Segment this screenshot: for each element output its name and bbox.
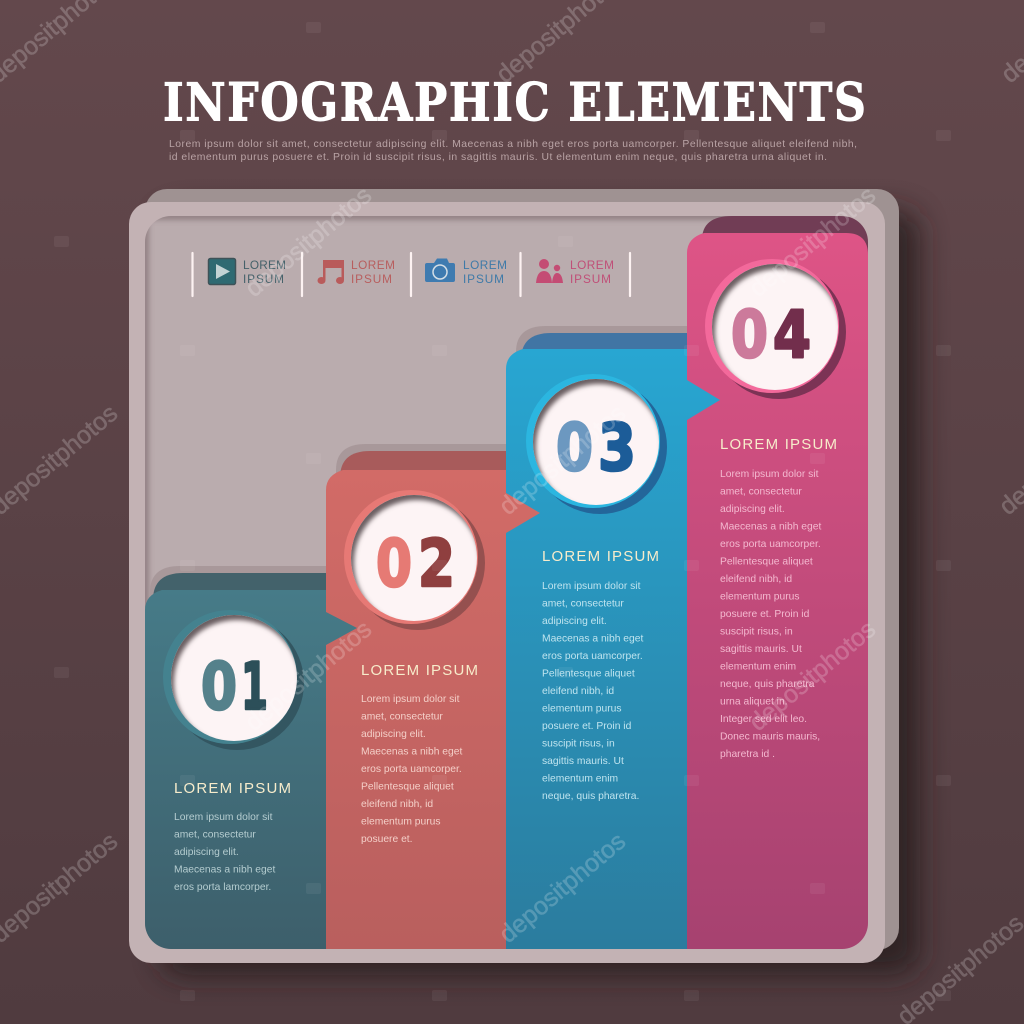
panel 04 back tab (702, 216, 868, 254)
text block 02: eleifend nibh, id (361, 799, 433, 810)
title: INFOGRAPHIC ELEMENTS (163, 73, 866, 133)
text block 02: adipiscing elit. (361, 729, 426, 740)
text block 02: posuere et. (361, 834, 413, 845)
text block 04: neque, quis pharetra (720, 679, 815, 690)
label: people: LOREM (570, 258, 614, 272)
text block 04: Integer sed elit leo. (720, 714, 807, 725)
label: camera: IPSUM (463, 272, 504, 286)
label: people: IPSUM (570, 272, 611, 286)
text block 04: Lorem ipsum dolor sit (720, 469, 819, 480)
icon: music (318, 260, 344, 284)
text block 04: sagittis mauris. Ut (720, 644, 802, 655)
label: play: LOREM (243, 258, 286, 272)
label: people (570, 258, 614, 286)
text block 01 (174, 780, 291, 893)
text block 02: Lorem ipsum dolor sit (361, 694, 460, 705)
text block 04: urna aliquet in. (720, 696, 788, 708)
intro text: id elementum purus posuere et. Proin id suscipit risus, in sagittis mauris. Ut elementum enim neque, quis pharetra urna aliquet in. (169, 152, 827, 163)
text block 03: amet, consectetur (542, 598, 624, 610)
text block 04: amet, consectetur (720, 486, 802, 498)
label: music: LOREM (351, 258, 395, 272)
frame front layer (129, 202, 885, 963)
text block 03: elementum enim (542, 774, 618, 784)
text block 03: posuere et. Proin id (542, 721, 632, 732)
frame inner tray (145, 216, 880, 960)
badge 01 (163, 610, 307, 753)
separators (192, 253, 630, 296)
badge 02: 0 (376, 527, 412, 602)
watermarks: depositphotos (494, 399, 631, 521)
text block 02: amet, consectetur (361, 712, 443, 722)
frame shadow (160, 210, 920, 975)
label: play: IPSUM (243, 272, 284, 286)
text block 02: Pellentesque aliquet (361, 782, 454, 792)
watermarks: depositphotos (494, 827, 631, 949)
text block 03: eros porta uamcorper. (542, 651, 643, 662)
text block 04: Maecenas a nibh eget (720, 522, 821, 532)
text block 02: Maecenas a nibh eget (361, 746, 462, 758)
text block 04: Donec mauris mauris, (720, 732, 820, 742)
panel 03 blue (506, 349, 720, 949)
watermarks: depositphotos (744, 615, 881, 737)
text block 04: suscipit risus, in (720, 626, 793, 638)
text block 04: LOREM IPSUM (720, 436, 837, 453)
icon row (192, 253, 630, 296)
label: camera (463, 258, 507, 286)
text block 04 (720, 436, 837, 760)
text block 04: elementum purus (720, 592, 800, 602)
text block 03: Pellentesque aliquet (542, 668, 635, 680)
text block 01: Maecenas a nibh eget (174, 864, 275, 876)
text block 02: LOREM IPSUM (361, 662, 478, 679)
badge 02 (344, 490, 487, 633)
text block 03: elementum purus (542, 704, 622, 714)
text block 04: eleifend nibh, id (720, 574, 792, 585)
text block 01: adipiscing elit. (174, 847, 239, 858)
watermarks: depositphotos (240, 615, 377, 737)
text block 03 (542, 548, 659, 802)
badge 04: 0 (731, 298, 768, 373)
panel 01 back tab (150, 566, 326, 596)
watermarks: depositphotos (240, 181, 377, 303)
text block 03: Maecenas a nibh eget (542, 634, 643, 644)
badge 04: 4 (773, 298, 811, 373)
text block 04: adipiscing elit. (720, 504, 785, 515)
text block 04: Pellentesque aliquet (720, 556, 813, 568)
badge 03: 3 (598, 411, 636, 486)
icon: camera (425, 258, 455, 282)
text block 01: eros porta lamcorper. (174, 882, 271, 893)
frame back layer (145, 189, 899, 950)
text block 02: elementum purus (361, 816, 441, 828)
text block 03: sagittis mauris. Ut (542, 756, 624, 767)
text block 01: amet, consectetur (174, 830, 256, 840)
badge 02: 2 (418, 527, 455, 602)
panel 02 red (326, 470, 540, 949)
label: play (243, 258, 286, 286)
badge 01: 1 (241, 650, 268, 725)
label: music (351, 258, 395, 286)
badge 04 (705, 259, 848, 402)
text block 03: LOREM IPSUM (542, 548, 659, 565)
text block 03: adipiscing elit. (542, 616, 607, 627)
panel 03 back tab (516, 326, 687, 352)
intro text (169, 139, 857, 163)
text block 04: posuere et. Proin id (720, 609, 810, 620)
text block 02 (361, 662, 478, 845)
text block 04: eros porta uamcorper. (720, 539, 821, 550)
text block 04: pharetra id . (720, 749, 775, 760)
icon: people (536, 259, 563, 283)
text block 03: neque, quis pharetra. (542, 791, 639, 802)
icon: play (208, 258, 236, 284)
text block 01: LOREM IPSUM (174, 780, 291, 797)
text block 04: elementum enim (720, 662, 796, 672)
text block 03: eleifend nibh, id (542, 686, 614, 697)
intro text: Lorem ipsum dolor sit amet, consectetur adipiscing elit. Maecenas a nibh eget eros porta uamcorper. Pellentesque aliquet eleifend nibh, (169, 139, 857, 150)
panel 01 teal (145, 590, 357, 949)
text block 02: eros porta uamcorper. (361, 764, 462, 775)
badge 01: 0 (201, 650, 237, 725)
label: camera: LOREM (463, 258, 507, 272)
text block 03: Lorem ipsum dolor sit (542, 581, 641, 592)
panel 04 pink (687, 233, 868, 949)
panel 02 back tab (336, 444, 506, 473)
badge 03 (526, 374, 669, 517)
text block 03: suscipit risus, in (542, 738, 615, 750)
badge 03: 0 (556, 411, 593, 486)
text block 01: Lorem ipsum dolor sit (174, 812, 273, 823)
label: music: IPSUM (351, 272, 392, 286)
watermarks: depositphotos (744, 181, 881, 303)
